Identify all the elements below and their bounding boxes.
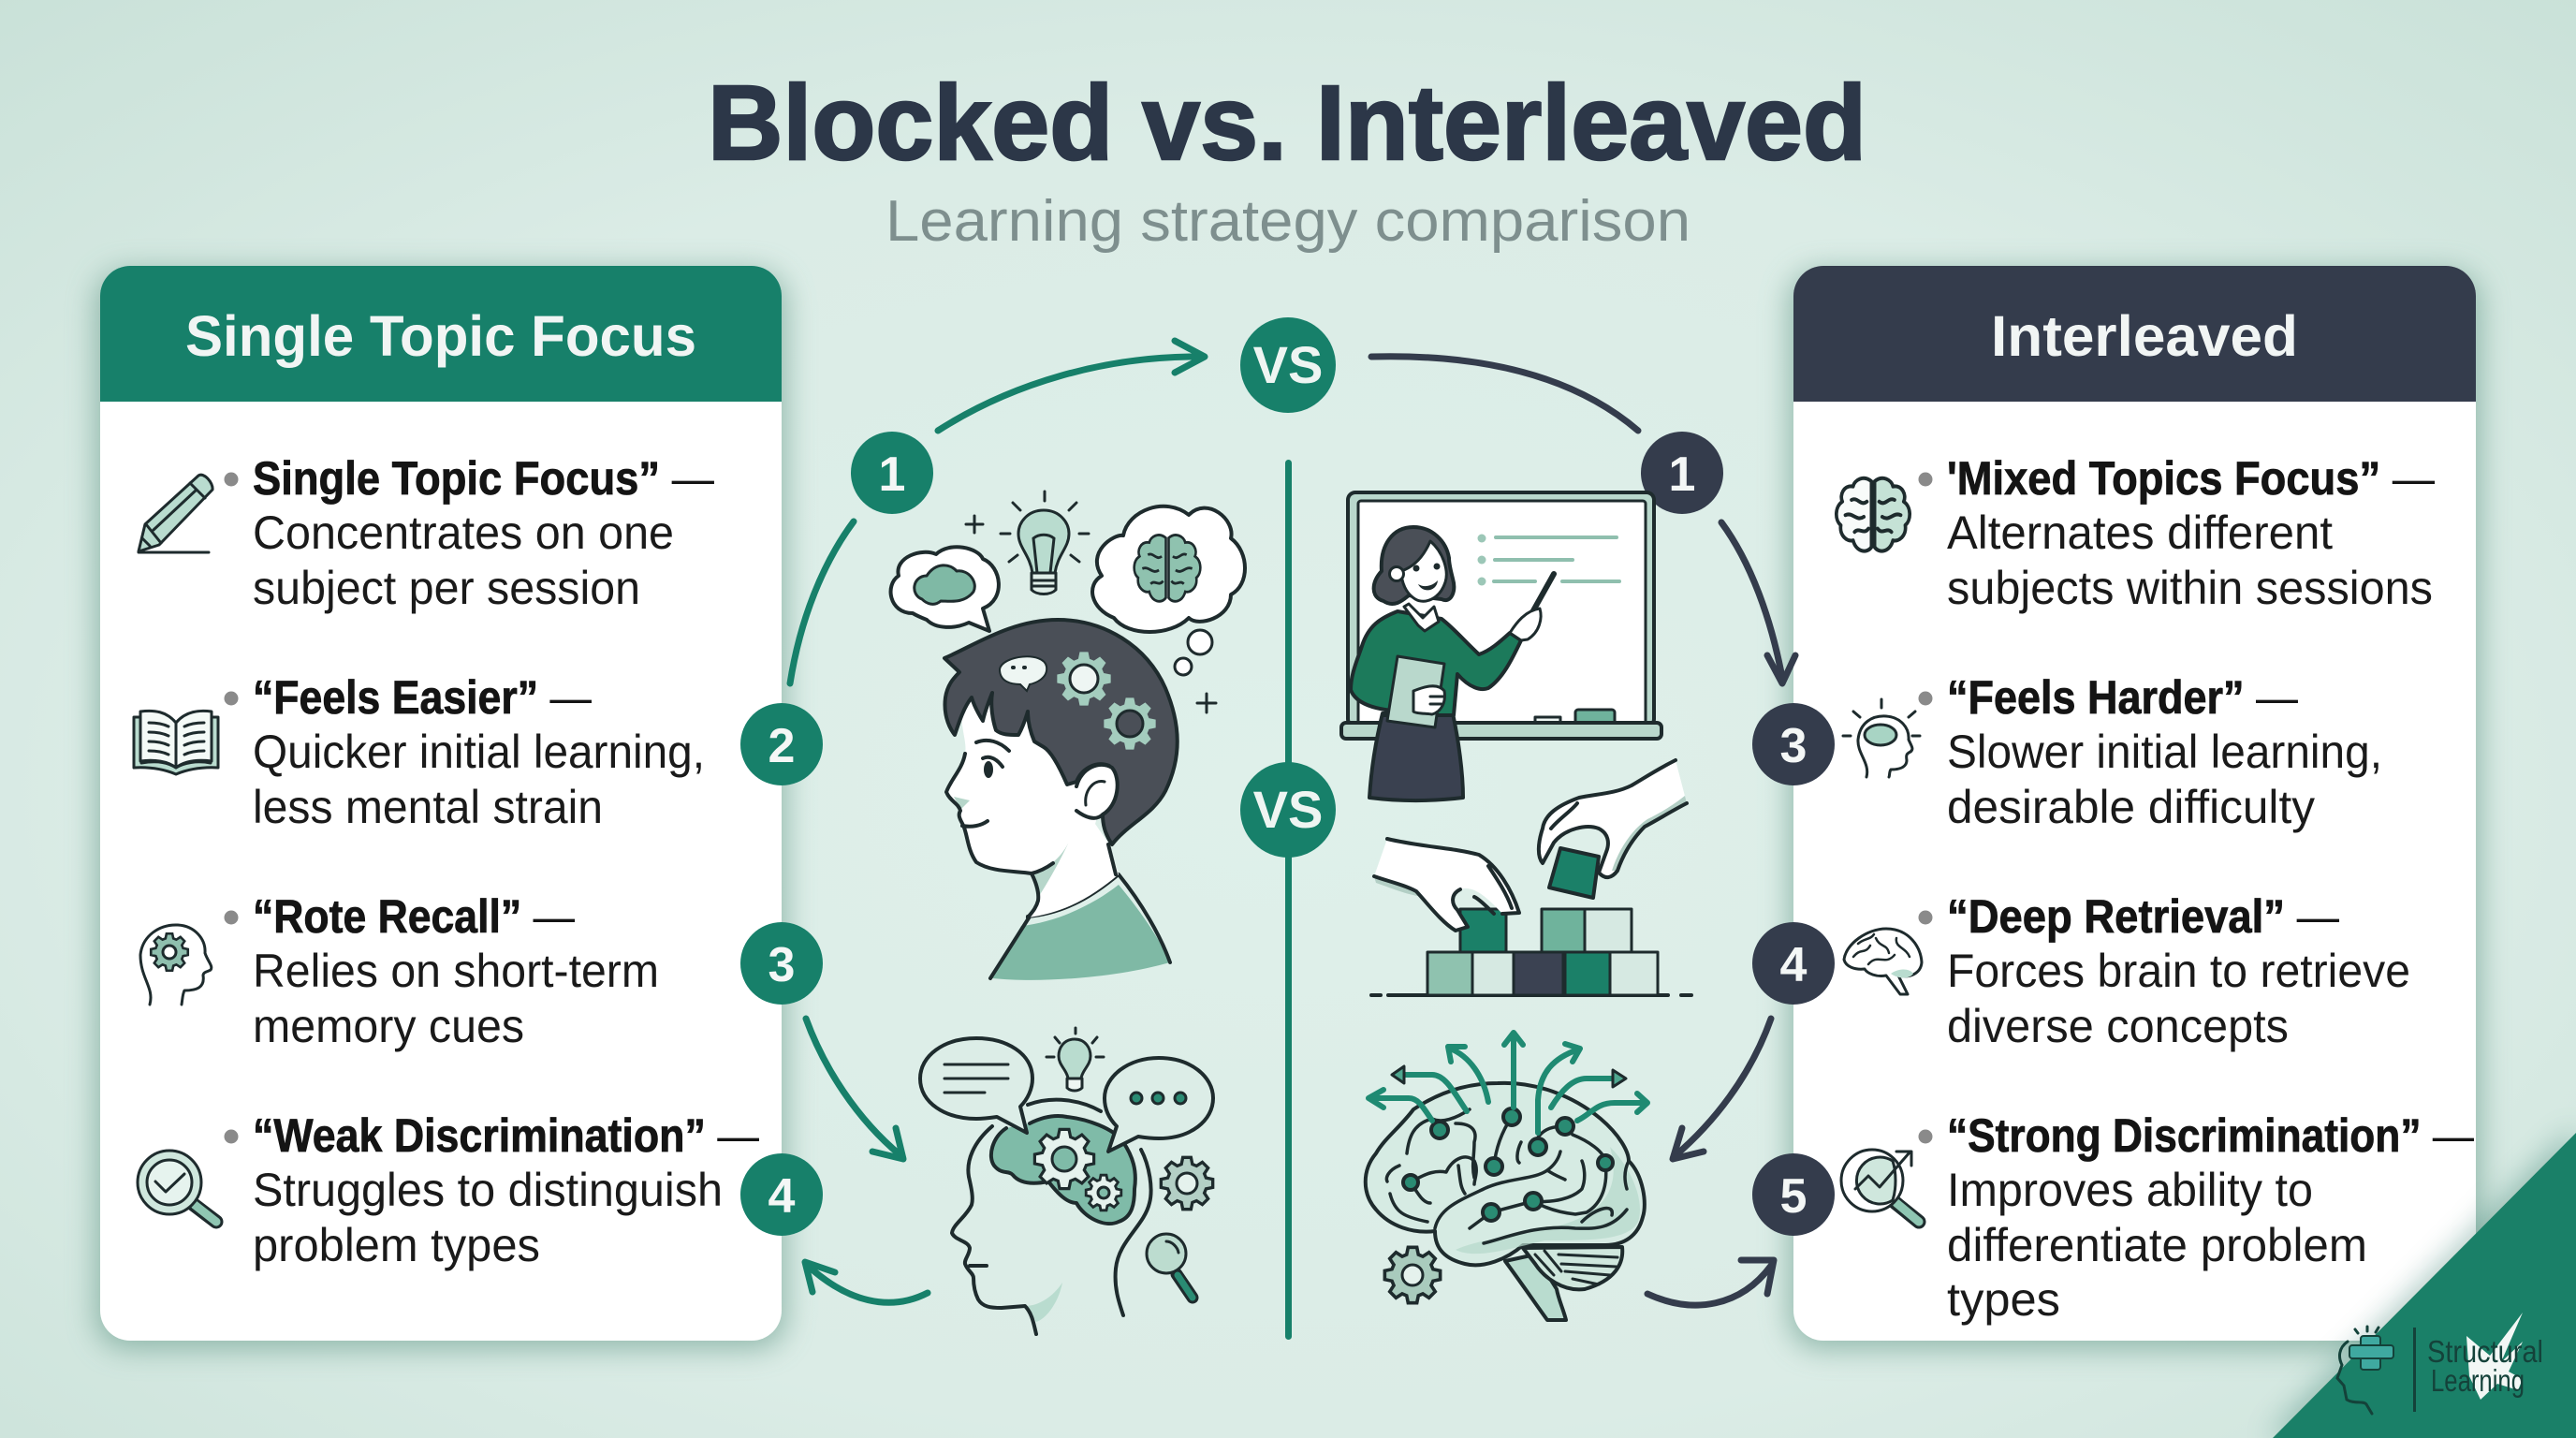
illustration: teacher at whiteboard — [1341, 492, 1691, 995]
number badge 2 left: 2 — [768, 719, 795, 773]
shirt — [990, 874, 1170, 980]
text: single topic focus: Single Topic Focus” — — [253, 452, 714, 505]
text: single topic focus — [225, 452, 714, 614]
whiteboard — [1341, 492, 1661, 739]
number badge 1 left: 1 — [879, 448, 905, 502]
teacher hair — [1374, 527, 1454, 604]
icon: head with gear — [140, 925, 212, 1005]
arrow: vs to 1, right — [1371, 357, 1638, 431]
number badge 1 right — [1641, 432, 1723, 514]
temporal lobe shading — [1456, 1147, 1640, 1254]
text: weak discrimination: Struggles to distinguish — [253, 1164, 723, 1216]
logo head and plus — [2337, 1327, 2393, 1414]
cerebrum — [1366, 1083, 1645, 1265]
center divider line — [1285, 460, 1292, 1340]
right panel header: Interleaved — [1991, 304, 2298, 368]
arrow: 3 to head, left — [806, 1019, 903, 1159]
brain nodes — [1403, 1108, 1613, 1221]
logo: structural learning — [2337, 1313, 2543, 1414]
icon: magnifier with check — [138, 1151, 216, 1222]
text: feels harder: desirable difficulty — [1947, 781, 2315, 833]
logo text: Structural — [2427, 1334, 2543, 1369]
arrow triangle heads — [1392, 1066, 1626, 1087]
teacher face and collar — [1389, 541, 1446, 631]
text: feels harder: Slower initial learning, — [1947, 726, 2382, 778]
number badge 4 left — [740, 1153, 823, 1236]
title: Blocked vs. Interleaved — [708, 64, 1866, 182]
left panel header — [100, 266, 782, 402]
text: deep retrieval: Forces brain to retrieve — [1947, 945, 2410, 997]
right panel header — [1793, 266, 2476, 402]
text: strong discrimination: Improves ability to — [1947, 1164, 2313, 1216]
text: strong discrimination: types — [1947, 1273, 2060, 1326]
text: feels harder: “Feels Harder” — — [1947, 671, 2298, 724]
brain folds — [1386, 1109, 1629, 1243]
logo leaf mark — [2466, 1313, 2523, 1400]
logo divider — [2413, 1328, 2416, 1412]
text: deep retrieval — [1919, 890, 2410, 1052]
left hand placing block — [1374, 839, 1519, 931]
number badge 3 right — [1752, 703, 1835, 785]
icon: head with glowing brain — [1843, 699, 1920, 777]
lightbulb — [1001, 492, 1089, 594]
text: weak discrimination — [225, 1109, 759, 1271]
panel: interleaved (right) — [1790, 266, 2480, 1348]
text: feels easier: less mental strain — [253, 781, 603, 833]
arrow: 4 to brain, right — [1673, 1019, 1771, 1159]
text: deep retrieval: “Deep Retrieval” — — [1947, 890, 2339, 943]
number badge 1 left — [851, 432, 933, 514]
text: feels easier: Quicker initial learning, — [253, 726, 705, 778]
head outline — [952, 1100, 1151, 1334]
vs badge middle — [1240, 762, 1336, 858]
brain gear — [1384, 1247, 1441, 1303]
icon: open book — [134, 711, 218, 774]
text: single topic focus: Concentrates on one — [253, 506, 674, 559]
text: mixed topics focus: subjects within sessions — [1947, 562, 2433, 614]
teacher skirt — [1369, 713, 1463, 800]
speech bubble in hair — [1000, 656, 1046, 691]
arrow: 1 to vs, left — [938, 341, 1205, 431]
thought cloud left — [891, 547, 999, 631]
text: strong discrimination: “Strong Discrimination” — — [1947, 1109, 2474, 1162]
vs badge top — [1240, 317, 1336, 413]
text: mixed topics focus: 'Mixed Topics Focus” — — [1947, 452, 2435, 505]
gears in brain — [1034, 1129, 1121, 1211]
logo text — [2427, 1334, 2543, 1398]
building blocks — [1371, 909, 1691, 995]
gear in hair 1 — [1057, 652, 1111, 706]
text: feels easier: “Feels Easier” — — [253, 671, 592, 724]
text: strong discrimination: differentiate problem — [1947, 1219, 2367, 1271]
arrow: 1 to 3, right — [1721, 522, 1795, 683]
panel: single topic focus (left) — [96, 266, 785, 1348]
vs badge top: VS — [1253, 335, 1323, 394]
gear in hair 2 — [1104, 697, 1156, 750]
arrow: brain to 5, right — [1647, 1260, 1774, 1305]
text: mixed topics focus: Alternates different — [1947, 506, 2333, 559]
illustration: brain with arrows — [1366, 1033, 1647, 1320]
illustration: head with brain and speech bubbles — [920, 1028, 1213, 1334]
side gear — [1161, 1157, 1213, 1210]
speech bubble with lines — [920, 1038, 1032, 1133]
text: strong discrimination — [1919, 1109, 2474, 1326]
speech bubble with dots — [1105, 1058, 1213, 1152]
number badge 1 right: 1 — [1669, 448, 1695, 502]
teacher pointing hand and pointer — [1510, 574, 1554, 640]
text: feels harder — [1919, 671, 2382, 833]
number badge 3 left — [740, 922, 823, 1005]
teacher body — [1351, 611, 1521, 715]
small lightbulb — [1046, 1028, 1104, 1091]
text: mixed topics focus — [1919, 452, 2435, 614]
number badge 5 right — [1752, 1153, 1835, 1236]
logo text: Learning — [2431, 1363, 2525, 1398]
corner triangle — [2268, 1128, 2576, 1438]
left panel header: Single Topic Focus — [185, 304, 696, 368]
number badge 3 right: 3 — [1780, 719, 1807, 773]
text: feels easier — [225, 671, 705, 833]
brain mass — [991, 1116, 1135, 1224]
number badge 4 right: 4 — [1780, 938, 1808, 992]
thought bubbles and plus signs — [966, 516, 1216, 712]
number badge 2 left — [740, 703, 823, 785]
teacher book and hand — [1387, 656, 1444, 727]
number badge 4 right — [1752, 922, 1835, 1005]
icon: brain top view — [1837, 478, 1910, 551]
icon: pencil — [139, 475, 212, 552]
illustration: boy thinking — [891, 492, 1245, 980]
icon: magnifier with rising chart — [1841, 1150, 1919, 1222]
text: deep retrieval: diverse concepts — [1947, 1000, 2289, 1052]
subtitle: Learning strategy comparison — [886, 189, 1690, 254]
arrow: head to 4, left — [805, 1262, 928, 1302]
text: rote recall — [225, 890, 659, 1052]
ear — [1076, 765, 1118, 818]
number badge 5 right: 5 — [1780, 1169, 1807, 1224]
face — [946, 674, 1123, 917]
thought cloud right with brain — [1092, 506, 1245, 632]
hair — [944, 620, 1178, 844]
text: single topic focus: subject per session — [253, 562, 640, 614]
number badge 3 left: 3 — [768, 938, 795, 992]
number badge 4 left: 4 — [768, 1169, 796, 1224]
cerebellum — [1523, 1247, 1622, 1289]
text: weak discrimination: “Weak Discrimination” — — [253, 1109, 759, 1162]
icon: brain side view — [1844, 929, 1922, 994]
brain stem — [1505, 1255, 1566, 1320]
text: weak discrimination: problem types — [253, 1219, 540, 1271]
arrow: 2 to 1, left — [790, 521, 854, 683]
magnifier — [1147, 1234, 1193, 1298]
text: rote recall: memory cues — [253, 1000, 524, 1052]
vs badge middle: VS — [1253, 780, 1323, 839]
text: rote recall: “Rote Recall” — — [253, 890, 575, 943]
text: rote recall: Relies on short-term — [253, 945, 659, 997]
right hand holding block — [1539, 760, 1687, 898]
radiating arrows — [1368, 1033, 1647, 1133]
